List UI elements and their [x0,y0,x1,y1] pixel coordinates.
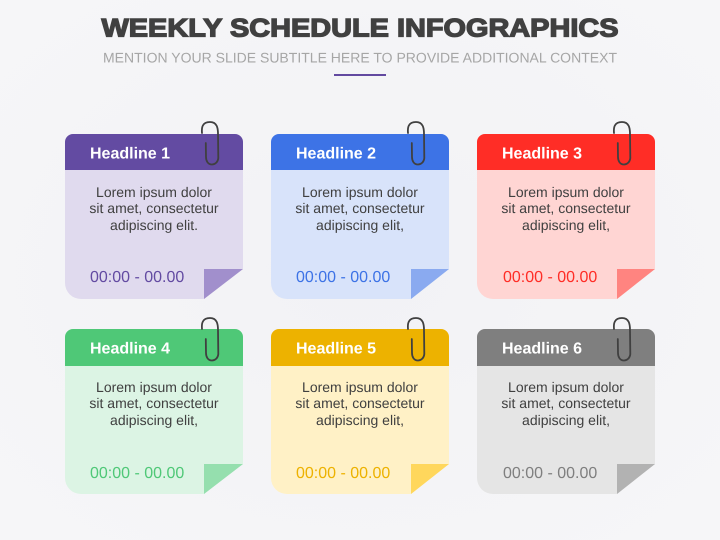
body text: adipiscing elit, [522,412,610,428]
panel: card 4 [65,318,243,494]
icon: paperclip [202,318,218,360]
body text: sit amet, consectetur [89,395,219,411]
headline: Headline 1 [90,146,170,162]
body text: sit amet, consectetur [295,200,425,216]
title underline [334,74,386,76]
title: WEEKLY SCHEDULE INFOGRAPHICS [102,14,618,42]
body text: adipiscing elit, [522,217,610,233]
time: 00:00 - 00.00 [503,465,597,482]
body text: Lorem ipsum dolor [302,184,418,200]
headline: Headline 3 [502,146,582,162]
time: 00:00 - 00.00 [90,465,184,482]
icon: page fold [411,269,449,299]
headline: Headline 5 [296,340,376,358]
icon: paperclip [614,122,630,164]
icon: paperclip [202,122,218,164]
panel: card 1 [65,122,243,299]
time: 00:00 - 00.00 [503,269,597,286]
body text: adipiscing elit. [110,217,198,233]
body text: adipiscing elit, [316,412,404,428]
icon: paperclip [614,318,630,360]
headline: Headline 2 [296,146,376,162]
panel: card 3 [477,122,655,299]
icon: page fold [411,464,449,494]
icon: page fold [204,464,243,494]
body text: sit amet, consectetur [295,395,425,411]
body text: sit amet, consectetur [501,395,631,411]
icon: paperclip [408,122,424,164]
body text: Lorem ipsum dolor [508,379,624,395]
icon: page fold [617,269,655,299]
panel: card 2 [271,122,449,299]
body text: Lorem ipsum dolor [302,379,418,395]
body text: sit amet, consectetur [501,200,631,216]
body text: Lorem ipsum dolor [96,184,212,200]
icon: page fold [617,464,655,494]
panel: card 5 [271,318,449,494]
icon: page fold [204,269,243,299]
panel: card 6 [477,318,655,494]
headline: Headline 4 [90,340,170,358]
body text: sit amet, consectetur [89,200,219,216]
body text: Lorem ipsum dolor [508,184,624,200]
body text: adipiscing elit, [110,412,198,428]
body text: adipiscing elit, [316,217,404,233]
icon: paperclip [408,318,424,360]
time: 00:00 - 00.00 [296,269,390,286]
time: 00:00 - 00.00 [90,269,184,286]
body text: Lorem ipsum dolor [96,379,212,395]
time: 00:00 - 00.00 [296,465,390,482]
headline: Headline 6 [502,340,582,358]
subtitle: MENTION YOUR SLIDE SUBTITLE HERE TO PROVIDE ADDITIONAL CONTEXT [103,50,617,66]
